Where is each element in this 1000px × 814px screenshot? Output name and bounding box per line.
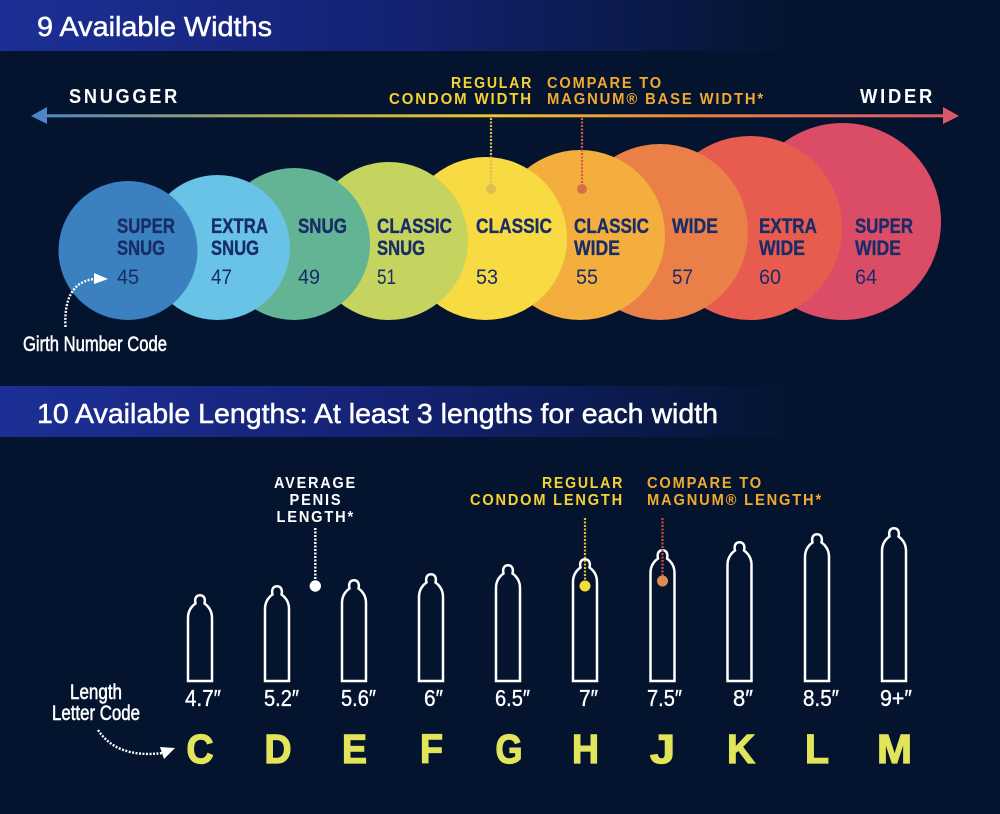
width label: extra snug 47: EXTRA	[211, 215, 268, 238]
width label: extra snug 47	[211, 215, 268, 289]
circle: classic	[404, 157, 567, 320]
icon: condom H	[573, 559, 597, 681]
width label: snug 49: SNUG	[298, 215, 347, 238]
width label: super wide 64	[855, 215, 913, 289]
callout: magnum length: MAGNUM® LENGTH*	[647, 492, 823, 509]
icon: condom F	[419, 574, 443, 681]
width label: classic snug 51: SNUG	[377, 237, 425, 260]
callout: magnum length	[647, 475, 823, 509]
label: snugger: SNUGGER	[69, 86, 180, 108]
circle: classic snug	[310, 162, 468, 320]
header band: lengths: 10 Available Lengths: At least 3 lengths for each width	[37, 398, 718, 429]
icon: condom C	[188, 595, 212, 681]
icon: condom K	[728, 542, 752, 681]
callout: magnum base width: MAGNUM® BASE WIDTH*	[547, 91, 765, 108]
marker: average penis length	[310, 528, 321, 592]
width label: classic snug 51: CLASSIC	[377, 215, 452, 238]
width label: super snug 45: SNUG	[117, 237, 165, 260]
callout: magnum base width: COMPARE TO	[547, 75, 663, 92]
width label: classic snug 51: 51	[377, 266, 396, 289]
length values row: 5.2″	[264, 685, 299, 711]
length values row: 8.5″	[803, 685, 839, 711]
circle chart: nine widths	[58, 123, 941, 320]
icon: condom J	[650, 550, 674, 681]
length letter codes row: K	[727, 726, 755, 772]
circle: classic wide	[495, 150, 665, 320]
panel: available lengths	[0, 386, 1000, 772]
callout: regular condom length	[470, 475, 624, 509]
callout: regular condom width	[389, 75, 533, 108]
length letter codes row: L	[805, 726, 829, 772]
length letter codes row: D	[264, 726, 292, 772]
marker: magnum base width	[577, 118, 587, 194]
circle: snug	[218, 168, 370, 320]
callout: average penis length	[274, 475, 357, 526]
width label: extra wide 60: 60	[759, 266, 781, 289]
width label: extra wide 60: WIDE	[759, 237, 805, 260]
arrow: length letter code pointer	[98, 730, 175, 759]
width label: snug 49	[298, 215, 347, 289]
width label: extra wide 60: EXTRA	[759, 215, 817, 238]
label: length letter code	[52, 681, 140, 725]
icon: condom D	[265, 586, 289, 681]
width label: classic 53: 53	[476, 266, 498, 289]
axis arrow: snugger to wider	[31, 107, 959, 124]
width label: wide 57: 57	[672, 266, 693, 289]
length letter codes row: M	[877, 726, 912, 772]
width label: classic 53: CLASSIC	[476, 215, 552, 238]
panel: available widths	[0, 0, 1000, 356]
icon: condom L	[805, 534, 829, 681]
width label: classic snug 51	[377, 215, 452, 289]
header band: widths	[0, 0, 1000, 51]
length letter codes row: E	[342, 726, 367, 772]
header band: lengths	[0, 386, 1000, 437]
label: length letter code: Length	[70, 681, 122, 704]
callout: regular condom width: REGULAR	[451, 75, 533, 92]
circle: super snug	[58, 181, 198, 320]
width label: extra wide 60	[759, 215, 817, 289]
length letter codes row: C	[186, 726, 214, 772]
marker: magnum length	[657, 518, 668, 586]
circle: wide	[572, 144, 748, 320]
callout: magnum base width	[547, 75, 765, 108]
width label: super wide 64: SUPER	[855, 215, 913, 238]
length values row: 5.6″	[341, 685, 376, 711]
width label: classic wide 55: 55	[576, 266, 598, 289]
callout: regular condom length: REGULAR	[542, 475, 624, 492]
width label: extra snug 47: SNUG	[211, 237, 259, 260]
length values row: 7″	[579, 685, 598, 711]
width label: super snug 45: 45	[117, 266, 139, 289]
marker: regular condom width	[486, 118, 496, 194]
icon: condom E	[342, 580, 366, 681]
icons: condom outlines	[188, 528, 906, 681]
width label: classic wide 55: CLASSIC	[574, 215, 649, 238]
label: girth number code: Girth Number Code	[23, 333, 167, 356]
width label: super snug 45: SUPER	[117, 215, 175, 238]
length values row: 6″	[424, 685, 443, 711]
width label: classic wide 55	[574, 215, 649, 289]
circle: extra wide	[658, 136, 842, 320]
length values row: 8″	[733, 685, 753, 711]
callout: regular condom width: CONDOM WIDTH	[389, 91, 533, 108]
callout: average penis length: AVERAGE	[274, 475, 357, 492]
width label: super snug 45	[117, 215, 175, 289]
length letter codes row: H	[572, 726, 599, 772]
width label: wide 57	[672, 215, 718, 289]
length values row	[185, 685, 912, 711]
width label: extra snug 47: 47	[211, 266, 232, 289]
icon: condom M	[882, 528, 906, 681]
width label: wide 57: WIDE	[672, 215, 718, 238]
marker: regular condom length	[580, 518, 590, 592]
width label: super wide 64: WIDE	[855, 237, 901, 260]
length letter codes row: F	[420, 726, 443, 772]
arrow: girth number code pointer	[65, 273, 108, 327]
callout: regular condom length: CONDOM LENGTH	[470, 492, 624, 509]
width label: snug 49: 49	[298, 266, 320, 289]
width label: classic wide 55: WIDE	[574, 237, 620, 260]
length values row: 6.5″	[495, 685, 530, 711]
width label: super wide 64: 64	[855, 266, 877, 289]
length values row: 9+″	[880, 685, 912, 711]
header band: widths: 9 Available Widths	[37, 11, 272, 42]
width label: classic 53	[476, 215, 552, 289]
icon: condom G	[496, 565, 520, 681]
circle: super wide	[744, 123, 941, 320]
length letter codes row: G	[496, 726, 522, 772]
length values row: 7.5″	[647, 685, 682, 711]
length letter codes row	[186, 726, 912, 772]
length letter codes row: J	[650, 726, 675, 772]
callout: average penis length: PENIS	[290, 492, 342, 509]
label: wider: WIDER	[860, 86, 935, 108]
callout: average penis length: LENGTH*	[276, 509, 355, 526]
circle: extra snug	[145, 175, 290, 320]
label: length letter code: Letter Code	[52, 702, 140, 725]
length values row: 4.7″	[185, 685, 221, 711]
callout: magnum length: COMPARE TO	[647, 475, 763, 492]
